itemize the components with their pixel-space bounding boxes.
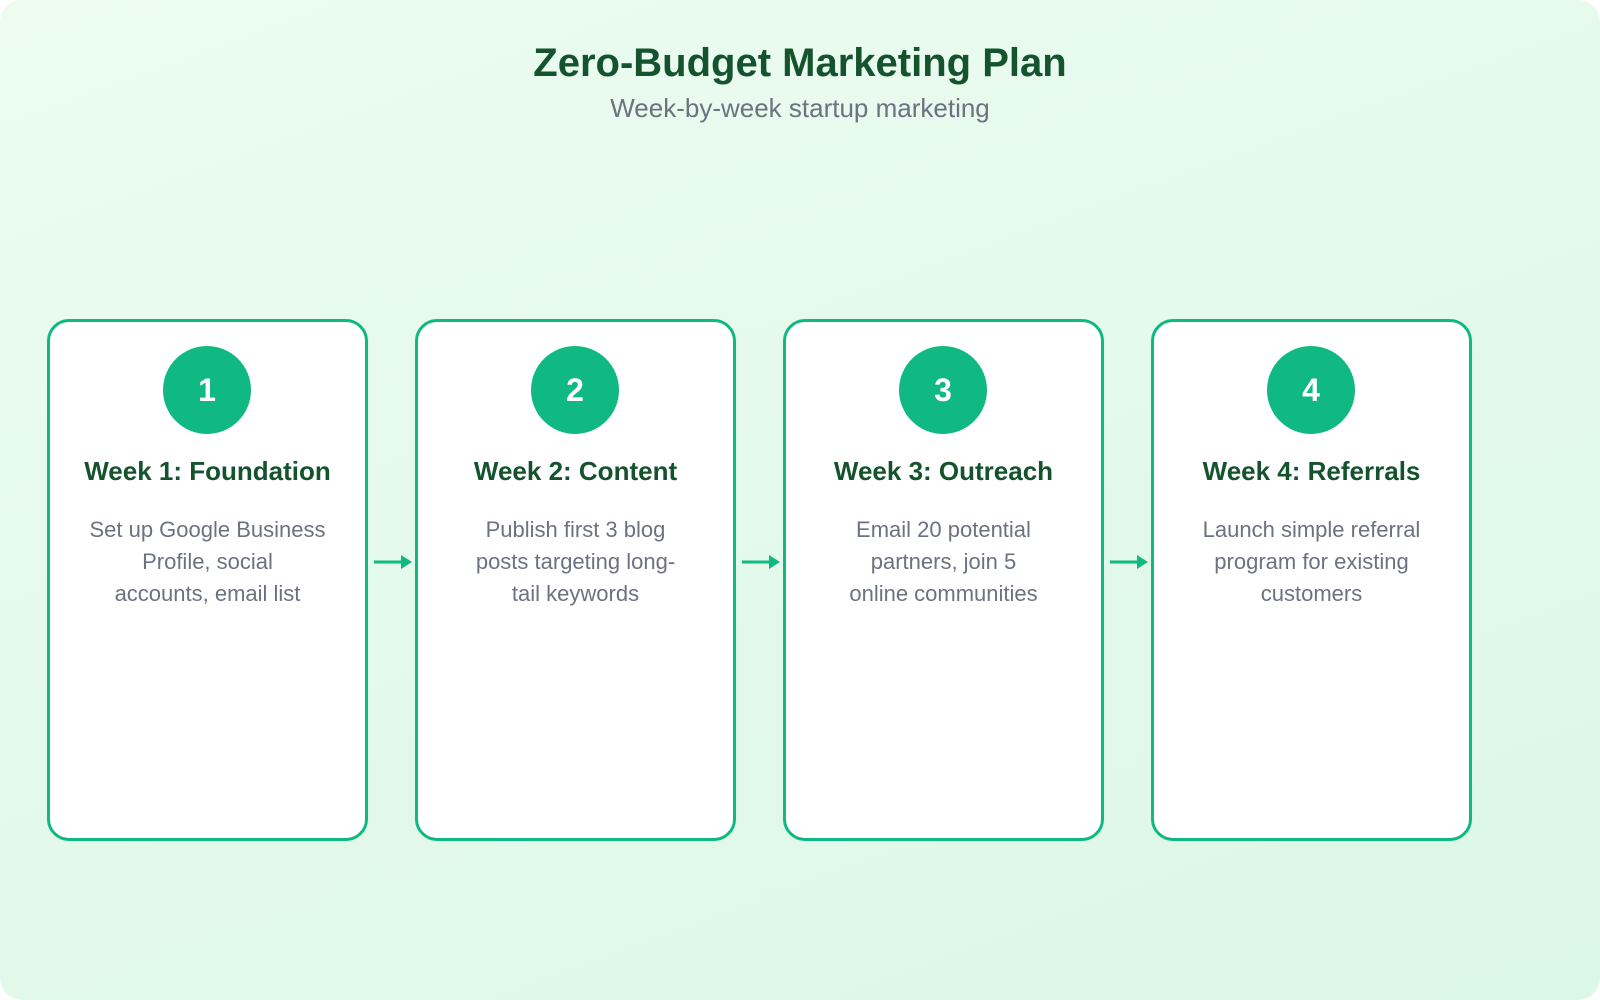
arrow 2 to 3	[742, 555, 780, 569]
icon: number 1: 1	[198, 372, 216, 408]
text: week 4 description	[1203, 517, 1420, 606]
icon: number 2: 2	[566, 372, 584, 408]
panel: week 1	[47, 319, 368, 841]
text: week 3 description: online communities	[849, 581, 1038, 606]
text: week 3 description	[849, 517, 1038, 606]
text: week 3 description: partners, join 5	[871, 549, 1016, 574]
heading: week 2: Week 2: Content	[474, 456, 677, 486]
text: week 2 description: Publish first 3 blog	[486, 517, 665, 542]
arrow 3 to 4	[1110, 555, 1148, 569]
arrow 1 to 2	[374, 555, 412, 569]
text: week 1 description: accounts, email list	[115, 581, 300, 606]
icon: number 4: 4	[1302, 372, 1320, 408]
text: week 3 description: Email 20 potential	[856, 517, 1031, 542]
text: week 1 description	[89, 517, 326, 606]
text: week 4 description: program for existing	[1214, 549, 1409, 574]
subtitle: Week-by-week startup marketing	[610, 93, 990, 123]
text: week 2 description: tail keywords	[512, 581, 639, 606]
heading: week 4: Week 4: Referrals	[1203, 456, 1420, 486]
panel: week 3	[783, 319, 1104, 841]
icon: number 1	[163, 346, 251, 434]
title: Zero-Budget Marketing Plan	[533, 41, 1067, 85]
panel: week 2	[415, 319, 736, 841]
icon: number 3: 3	[934, 372, 952, 408]
text: week 1 description: Profile, social	[142, 549, 273, 574]
heading: week 1: Week 1: Foundation	[84, 456, 331, 486]
heading: week 3: Week 3: Outreach	[834, 456, 1053, 486]
text: week 2 description	[476, 517, 675, 606]
text: week 4 description: Launch simple referral	[1203, 517, 1420, 542]
icon: number 3	[899, 346, 987, 434]
icon: number 4	[1267, 346, 1355, 434]
panel: week 4	[1151, 319, 1472, 841]
text: week 4 description: customers	[1261, 581, 1362, 606]
text: week 1 description: Set up Google Business	[89, 517, 326, 542]
text: week 2 description: posts targeting long-	[476, 549, 675, 574]
icon: number 2	[531, 346, 619, 434]
